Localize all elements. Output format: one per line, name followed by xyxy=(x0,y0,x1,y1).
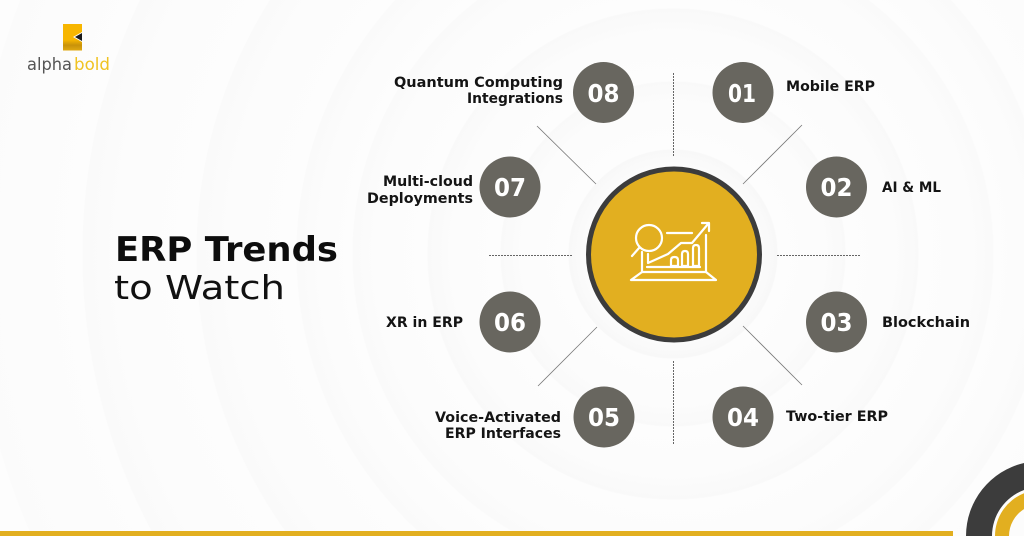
item 08: Quantum Computing Integrations: Integrations xyxy=(467,91,563,107)
item 01: Mobile ERP xyxy=(712,62,875,123)
item 04: Two-tier ERP xyxy=(712,386,888,448)
logo wordmark: alpha xyxy=(27,55,72,75)
item 08: Quantum Computing Integrations: Quantum Computing xyxy=(394,75,563,91)
item 07: Multi-cloud Deployments xyxy=(367,156,540,218)
logo wordmark xyxy=(27,55,110,75)
title xyxy=(114,230,338,307)
corner rings decoration xyxy=(966,463,1024,536)
item 05: Voice-Activated ERP Interfaces: Voice-Activated xyxy=(435,410,561,426)
central circle xyxy=(588,169,760,340)
item 05: Voice-Activated ERP Interfaces: 05 xyxy=(588,403,620,432)
item 04: Two-tier ERP: 04 xyxy=(727,403,759,432)
item 07: Multi-cloud Deployments: Multi-cloud xyxy=(383,174,473,190)
item 05: Voice-Activated ERP Interfaces: ERP Interfaces xyxy=(445,426,561,442)
item 02: AI & ML xyxy=(806,156,941,218)
item 08: Quantum Computing Integrations: 08 xyxy=(588,79,620,108)
connector lines xyxy=(489,73,860,445)
item 02: AI & ML: AI & ML xyxy=(882,180,941,196)
icon: analytics laptop with magnifier xyxy=(631,223,716,280)
title: ERP Trends xyxy=(115,230,338,270)
logo wordmark: bold xyxy=(74,55,110,75)
item 03: Blockchain: 03 xyxy=(820,308,852,337)
item 08: Quantum Computing Integrations xyxy=(394,62,634,123)
item 03: Blockchain: Blockchain xyxy=(882,315,970,331)
item 06: XR in ERP: 06 xyxy=(494,308,526,337)
item 01: Mobile ERP: Mobile ERP xyxy=(786,79,875,95)
item 01: Mobile ERP: 01 xyxy=(728,79,756,108)
item 06: XR in ERP xyxy=(386,292,540,352)
title: to Watch xyxy=(114,268,285,307)
logo: alphabold xyxy=(27,24,110,75)
bottom accent bar xyxy=(0,531,953,536)
icon: logo mark xyxy=(63,24,82,50)
item 04: Two-tier ERP: Two-tier ERP xyxy=(786,409,888,425)
item 06: XR in ERP: XR in ERP xyxy=(386,315,463,331)
item 07: Multi-cloud Deployments: Deployments xyxy=(367,191,473,207)
item 05: Voice-Activated ERP Interfaces xyxy=(435,386,634,448)
item 02: AI & ML: 02 xyxy=(820,173,852,202)
item 03: Blockchain xyxy=(806,292,970,352)
item 07: Multi-cloud Deployments: 07 xyxy=(494,173,526,202)
